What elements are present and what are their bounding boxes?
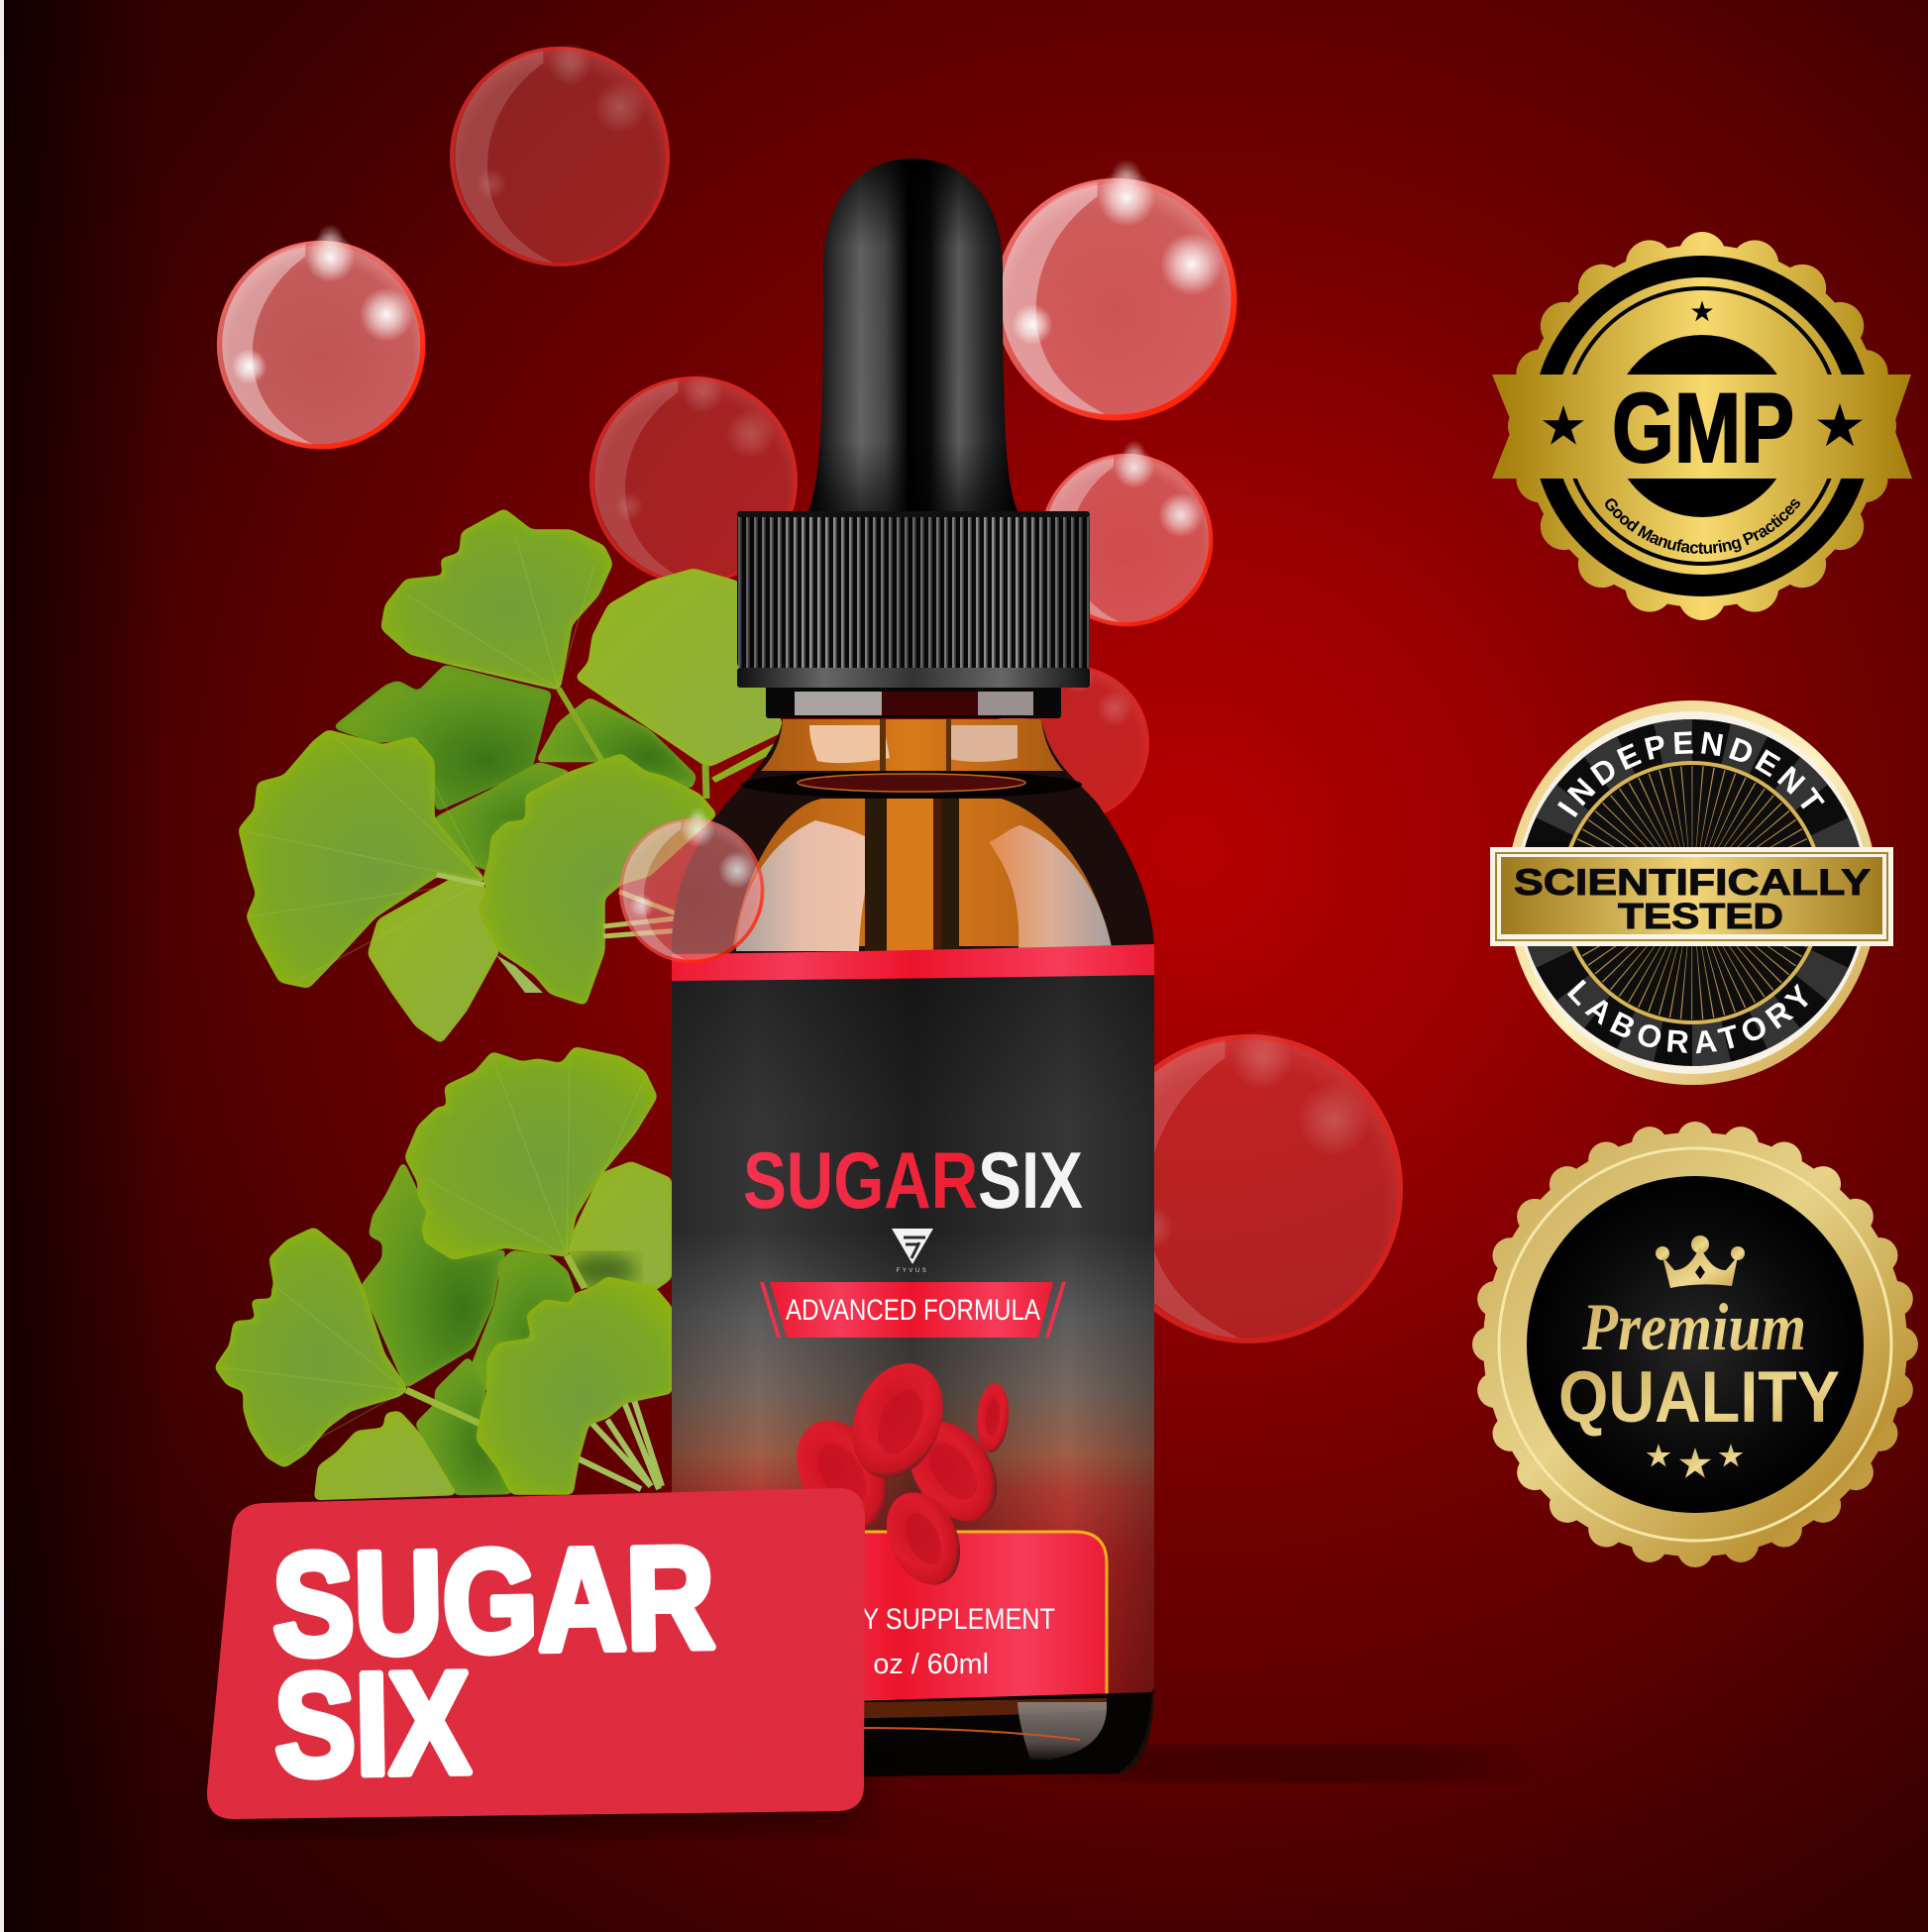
left edge strip <box>0 0 4 1932</box>
advanced formula banner: ADVANCED FORMULA <box>786 1294 1040 1327</box>
badge: premium quality <box>1483 1132 1907 1556</box>
GMP stars <box>1543 403 1863 446</box>
bottle label body <box>672 973 1154 1706</box>
supplement panel: DIETARY SUPPLEMENT <box>773 1603 1055 1636</box>
independent arc text: INDEPENDENT <box>1557 731 1825 817</box>
scientifically tested bar <box>1490 847 1893 946</box>
advanced formula banner <box>760 1282 1066 1338</box>
quality text: QUALITY <box>1558 1357 1840 1438</box>
premium script text: Premium <box>1581 1289 1806 1364</box>
bottle base reflections <box>674 1692 1152 1778</box>
GMP ribbon <box>1492 375 1912 479</box>
supplement panel: 2 fl oz / 60ml <box>827 1649 989 1680</box>
bubble: right of cap <box>1040 440 1213 626</box>
bubble: front of bottle <box>619 806 764 963</box>
left vignette <box>0 0 168 1932</box>
product name: SUGARSIX <box>743 1136 1083 1226</box>
red product card <box>207 1488 865 1819</box>
GMP title: GMP <box>1612 373 1794 483</box>
crown icon <box>1656 1235 1745 1288</box>
dropper bulb <box>808 159 1018 511</box>
upper ginkgo leaves <box>240 510 784 1042</box>
scientifically tested bar: SCIENTIFICALLY <box>1514 862 1871 903</box>
laboratory arc text: LABORATORY <box>1567 979 1808 1054</box>
bubble: right of neck <box>995 663 1149 820</box>
bubble: large right of label <box>1094 1028 1403 1343</box>
seal rings and sunburst <box>1507 700 1877 1085</box>
dropper bottle <box>672 159 1154 1778</box>
premium seal <box>1483 1132 1907 1556</box>
GMP curved caption: Good Manufacturing Practices <box>1605 498 1800 554</box>
label red band <box>672 944 1154 981</box>
bubble: top right of dropper <box>995 159 1236 420</box>
GMP seal burst <box>1521 245 1883 607</box>
bubble: top centre <box>450 43 670 267</box>
three stars <box>1647 1444 1743 1478</box>
badge: GMP <box>1492 232 1912 620</box>
brand logo <box>892 1229 933 1274</box>
scientifically tested bar: TESTED <box>1618 896 1783 936</box>
card shadow <box>213 1754 862 1833</box>
ribbed cap <box>737 511 1090 688</box>
bottle glass <box>672 719 1154 1778</box>
bubble: top left <box>217 224 425 449</box>
red blood cells <box>778 1349 1016 1597</box>
bubble: behind cap left <box>589 373 798 585</box>
supplement panel <box>694 1532 1107 1704</box>
GMP top star <box>1691 301 1713 321</box>
card text: six: SIX <box>273 1642 472 1806</box>
card text: sugar: SUGAR <box>271 1516 715 1685</box>
brand logo: FYVUS <box>897 1268 928 1274</box>
bottle cast shadow <box>1060 1748 1516 1779</box>
lower ginkgo leaves <box>216 1048 671 1499</box>
cap collar <box>766 685 1061 718</box>
badge: scientifically tested <box>1490 700 1893 1085</box>
